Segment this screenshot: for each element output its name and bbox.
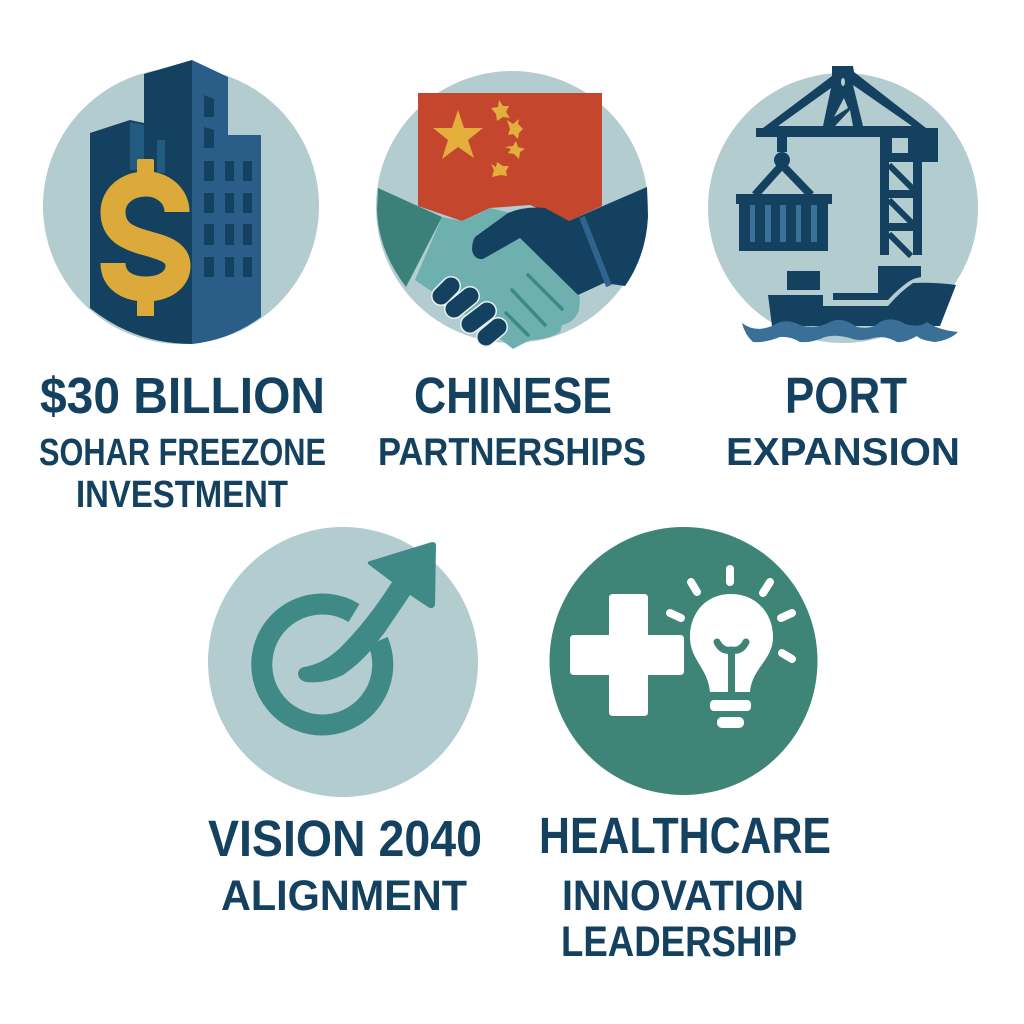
icon: dark hand [472, 187, 648, 295]
icon: dollar sign [113, 159, 178, 316]
icon: light hand [415, 208, 580, 349]
icon: crane [755, 66, 938, 256]
panel: Chinese partnerships [376, 71, 648, 474]
panel: Vision 2040 [208, 527, 482, 920]
label: Innovation: INNOVATION [562, 872, 804, 920]
label: Sohar Freezone: SOHAR FREEZONE [39, 432, 326, 474]
heading: Port: PORT [785, 367, 907, 424]
label: Expansion: EXPANSION [726, 431, 960, 474]
label: Leadership: LEADERSHIP [561, 918, 797, 966]
label: Alignment: ALIGNMENT [221, 872, 467, 920]
icon: cross and light bulb [550, 527, 818, 795]
icon: container [736, 194, 832, 251]
icon: medical cross [570, 594, 684, 716]
icon: left sleeve [377, 188, 442, 287]
icon: skyscraper with dollar sign [43, 60, 319, 344]
heading: Chinese: CHINESE [414, 367, 612, 424]
icon: ship [768, 266, 956, 326]
label: Partnerships: PARTNERSHIPS [378, 431, 646, 474]
icon: target with arrow [208, 527, 478, 797]
icon: crane and ship [708, 66, 978, 343]
heading: Healthcare: HEALTHCARE [539, 807, 831, 864]
label: Investment: INVESTMENT [76, 474, 288, 516]
panel: port expansion [708, 66, 978, 474]
heading: Vision 2040: VISION 2040 [208, 810, 482, 867]
icon: waves [742, 319, 958, 342]
heading: $30 billion: $30 BILLION [40, 367, 325, 424]
icon: flag and handshake [376, 71, 648, 349]
icon: Chinese flag [418, 93, 602, 221]
icon: light bulb [670, 569, 792, 728]
icon: fingers [441, 286, 498, 337]
panel: investment [39, 60, 326, 516]
panel: Healthcare innovation [539, 527, 831, 966]
